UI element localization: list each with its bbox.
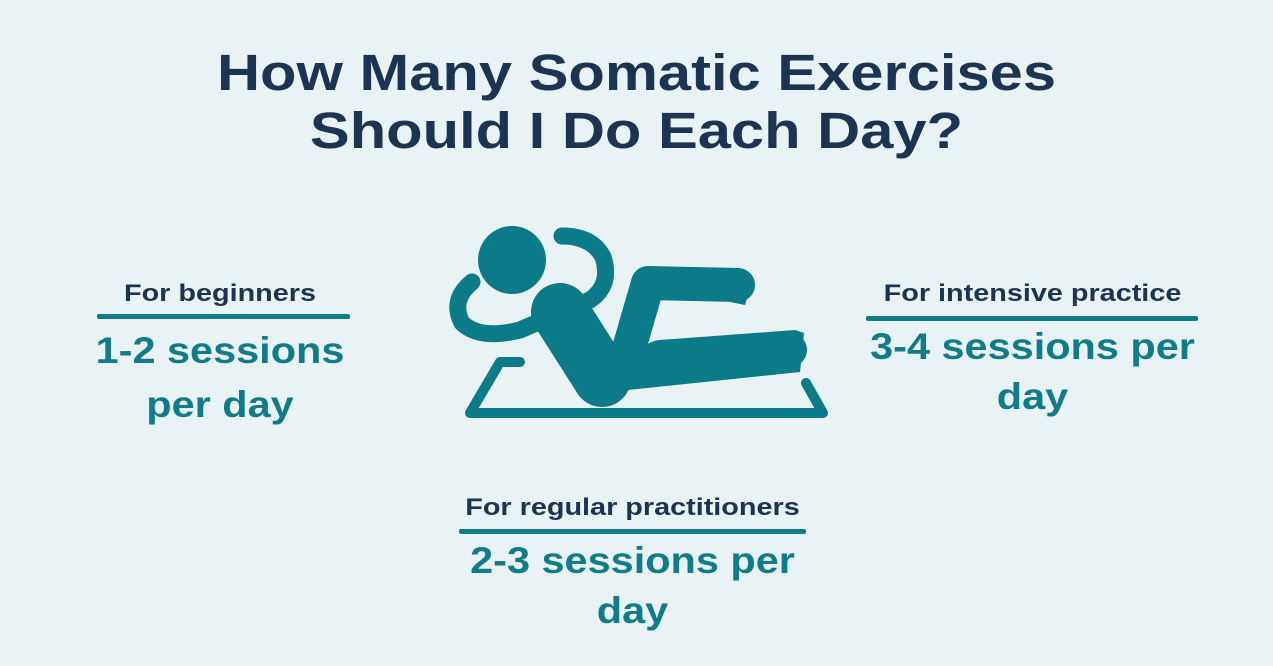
value: regular: day: [597, 590, 668, 631]
block: beginners: [96, 280, 350, 425]
raised leg: [630, 283, 738, 345]
title: [217, 44, 1056, 159]
value: regular: [470, 540, 795, 631]
value: intensive: [870, 326, 1195, 417]
arm loop: [458, 236, 606, 334]
torso: [560, 312, 602, 378]
title: Should I Do Each Day?: [310, 102, 963, 159]
value: intensive: 3-4 sessions per: [870, 326, 1195, 367]
mat: [470, 362, 823, 413]
value: regular: 2-3 sessions per: [470, 540, 795, 581]
block: regular: [459, 494, 806, 631]
head: [478, 226, 546, 294]
block: intensive: [866, 280, 1198, 417]
value: intensive: day: [997, 376, 1068, 417]
title: How Many Somatic Exercises: [217, 44, 1056, 101]
value: beginners: [96, 330, 344, 425]
value: beginners: per day: [146, 384, 294, 425]
lower leg: [620, 350, 790, 375]
heading: intensive: For intensive practice: [884, 280, 1181, 307]
heading: regular: For regular practitioners: [465, 494, 800, 521]
heading: beginners: For beginners: [124, 280, 316, 307]
icon: person doing crunch on mat: [449, 226, 828, 418]
value: beginners: 1-2 sessions: [96, 330, 344, 371]
